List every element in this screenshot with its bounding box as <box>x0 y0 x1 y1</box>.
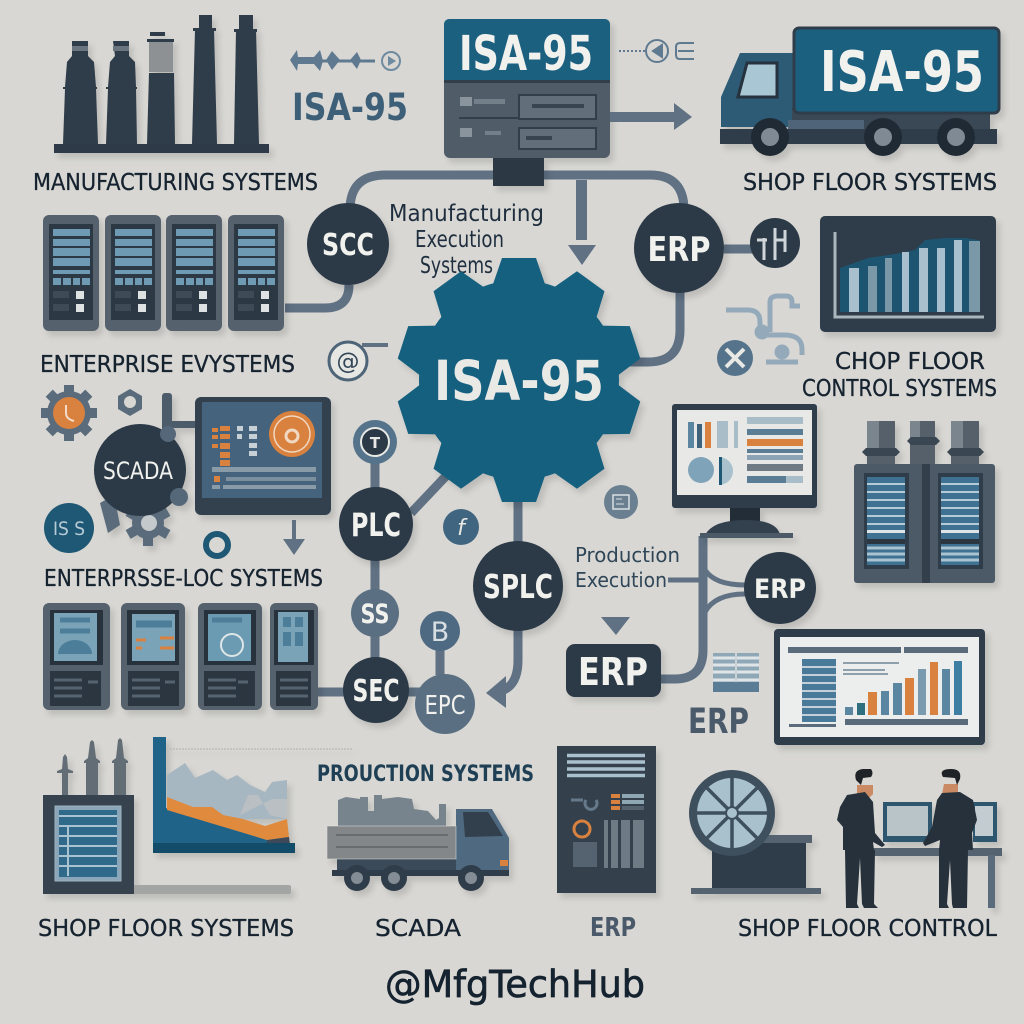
icon: at sign circle <box>329 342 388 380</box>
node: small key icon: T <box>370 434 381 452</box>
label: manufacturing systems: MANUFACTURING SYSTEMS <box>33 170 318 196</box>
icon: hex nut <box>118 389 142 416</box>
label: shop floor systems bottom: SHOP FLOOR SYSTEMS <box>38 916 294 942</box>
node: SPLC <box>473 541 563 631</box>
arrow: device to truck <box>610 103 692 130</box>
icon: small blue badge <box>443 509 479 545</box>
chart: control panel bars <box>820 216 996 332</box>
panel: top centre device <box>444 19 610 186</box>
node: ERP upper <box>634 203 724 293</box>
arrow: down to gear <box>568 180 596 265</box>
chart: dashboard bars <box>774 629 985 745</box>
icon: doc badge <box>604 485 638 519</box>
icon: truck ISA-95: ISA-95 <box>820 40 984 105</box>
label: ERP standalone: ERP <box>688 702 749 742</box>
panel: SCADA: SCADA <box>103 457 173 485</box>
node: PLC: PLC <box>351 506 401 544</box>
node: B: B <box>431 617 449 648</box>
icon: small blue badge: f <box>457 516 468 541</box>
label: chop floor control systems: CONTROL SYSTEMS <box>802 376 997 402</box>
icon: mini table <box>713 653 759 692</box>
text: manufacturing execution systems: Execution <box>415 227 504 253</box>
node: B <box>420 611 460 651</box>
icon: workstation table and monitor <box>873 802 1002 908</box>
label: chop floor control systems: CHOP FLOOR <box>835 349 985 375</box>
panel: ERP cabinet <box>557 746 656 893</box>
node: ERP box: ERP <box>578 650 648 694</box>
arrow: SCADA down <box>283 520 305 555</box>
label: enterprise evystems: ENTERPRISE EVYSTEMS <box>40 352 295 378</box>
label: prouction systems: PROUCTION SYSTEMS <box>317 762 534 787</box>
text: manufacturing execution systems <box>389 201 544 279</box>
panel: twin stack machine <box>854 421 995 583</box>
icon: person right <box>923 769 977 908</box>
node: SPLC: SPLC <box>483 567 553 606</box>
panel: enterprise servers <box>43 215 284 331</box>
icon: person left <box>837 769 885 908</box>
node: PLC <box>339 487 413 561</box>
arrow: SPLC to EPC head <box>486 676 506 708</box>
node: ERP lower <box>744 552 816 624</box>
panel: SCADA <box>94 393 331 546</box>
label: ERP bottom: ERP <box>590 913 636 943</box>
label: SCADA bottom: SCADA <box>375 916 461 942</box>
icon: ERP small gauge <box>750 218 800 268</box>
text: production execution: Production <box>575 543 680 567</box>
panel: top centre device: ISA-95 <box>459 26 593 82</box>
label: shop floor control: SHOP FLOOR CONTROL <box>738 916 997 942</box>
icon: ring <box>206 534 228 556</box>
node: SS <box>351 589 399 637</box>
icon: blue badge: IS S <box>53 518 85 540</box>
node: SCC: SCC <box>322 228 374 263</box>
icon: pipework <box>726 296 802 362</box>
panel: monitor dashboard <box>672 404 817 538</box>
connector pipes <box>285 175 752 692</box>
heading: ISA-95 small: ISA-95 <box>292 86 408 129</box>
node: small key icon <box>353 420 397 464</box>
icon: central gear <box>395 258 643 502</box>
icon: at sign circle: @ <box>336 349 360 375</box>
icon: X circle <box>717 340 753 376</box>
icon: dump truck <box>327 795 509 891</box>
text: production execution <box>575 543 680 592</box>
node: SEC <box>343 657 409 723</box>
chart: area chart <box>153 737 352 853</box>
node: EPC <box>415 674 475 734</box>
label: shop floor systems top: SHOP FLOOR SYSTEMS <box>743 170 997 196</box>
icon: factory <box>43 738 291 894</box>
label: chop floor control systems <box>802 349 997 402</box>
icon: truck ISA-95 <box>720 28 999 156</box>
icon: dashed link and media glyphs <box>619 40 694 62</box>
label: enterprsse-loc systems: ENTERPRSSE-LOC SYSTEMS <box>44 566 323 592</box>
node: SS: SS <box>360 599 390 630</box>
text: manufacturing execution systems: Systems <box>420 253 493 279</box>
node: EPC: EPC <box>424 691 466 721</box>
icon: orange gear <box>41 385 97 441</box>
node: SCC <box>307 203 389 285</box>
icon: blue badge <box>44 503 94 553</box>
icon: triangle marker <box>601 617 630 635</box>
footer handle: @MfgTechHub <box>385 963 645 1006</box>
icon: small arrows row <box>290 50 400 71</box>
panel: four control devices <box>43 603 318 710</box>
text: production execution: Execution <box>575 568 667 592</box>
icon: central gear: ISA-95 <box>434 349 604 413</box>
icon: wheel machine <box>689 770 821 894</box>
node: SEC: SEC <box>352 674 400 709</box>
node: ERP upper: ERP <box>648 230 710 270</box>
text: manufacturing execution systems: Manufacturing <box>389 201 544 227</box>
icon: smokestacks <box>54 15 269 153</box>
node: ERP lower: ERP <box>754 574 806 605</box>
